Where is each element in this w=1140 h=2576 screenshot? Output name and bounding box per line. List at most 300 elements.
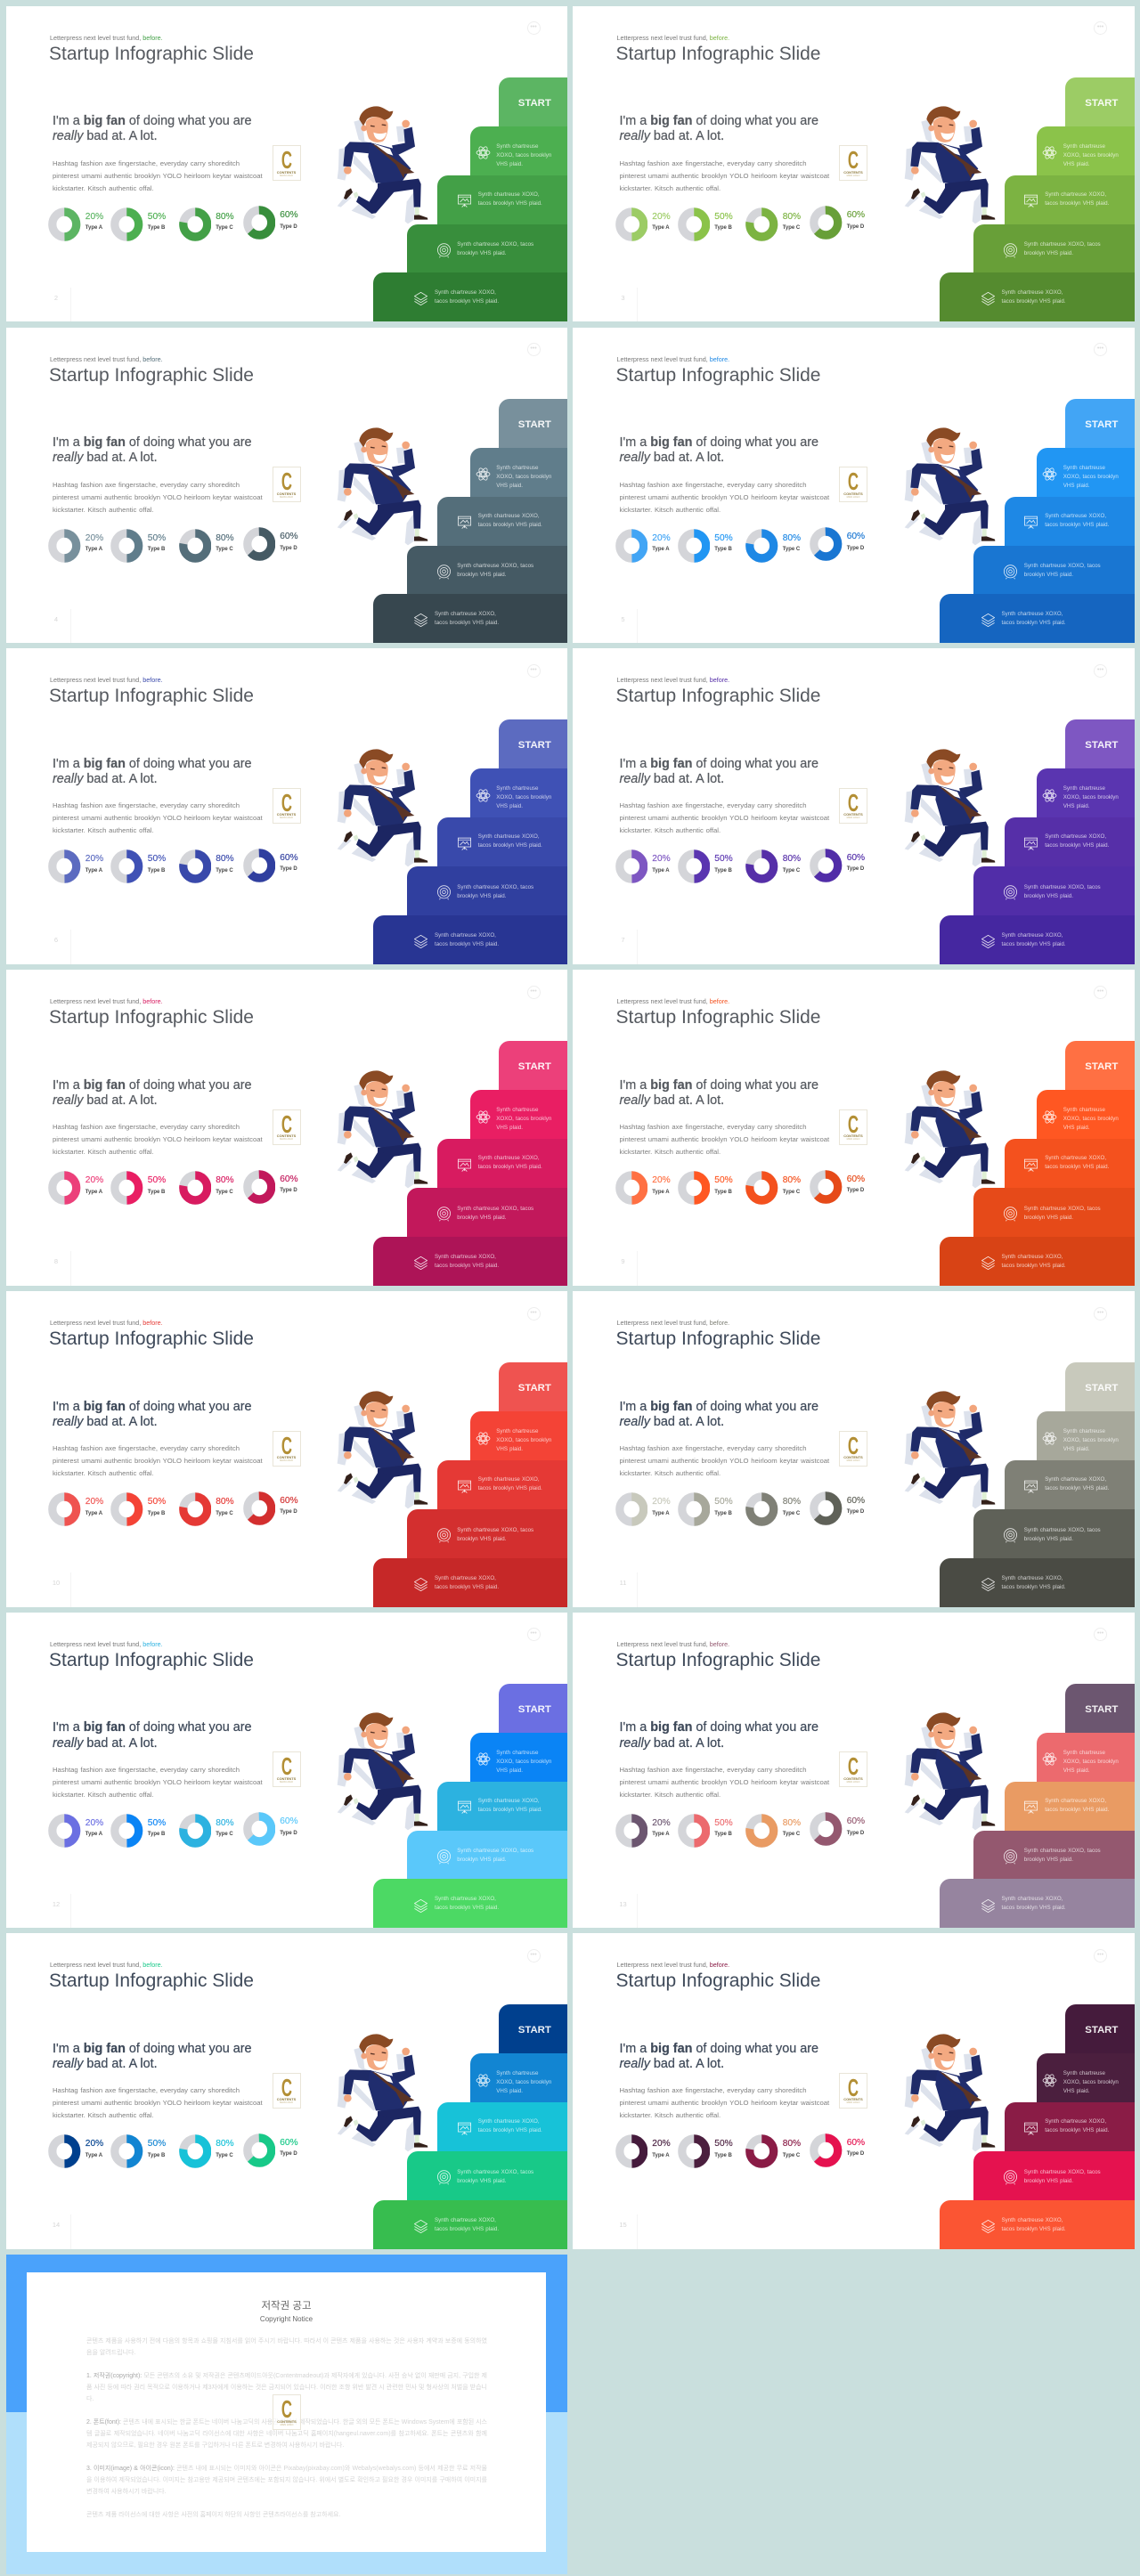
step: start: START — [1085, 1061, 1118, 1072]
donut: Type A: Type A — [652, 1832, 670, 1837]
step 2: XOXO, tacos brooklyn — [496, 152, 551, 158]
illustration: running businessman — [337, 749, 428, 867]
donut: Type D: 60% — [847, 853, 865, 863]
headline: I'm a big fan of doing what you are — [53, 2042, 252, 2056]
paragraph: pinterest umami authentic brooklyn YOLO heirloom keytar waistcoat — [53, 2099, 263, 2107]
step 4 — [973, 224, 1135, 272]
icon: menu dots: ••• — [530, 345, 537, 352]
donut: Type B: 50% — [148, 212, 166, 222]
donut: Type B: Type B — [714, 1190, 732, 1195]
step 4: brooklyn VHS plaid. — [1024, 2178, 1073, 2184]
headline — [53, 757, 252, 786]
step 2: VHS plaid. — [1063, 1125, 1089, 1131]
logo stamp: C — [848, 146, 859, 174]
step: start — [499, 2004, 567, 2053]
step 2: Synth chartreuse — [1063, 785, 1105, 792]
donut: Type D: 60% — [280, 1496, 298, 1505]
step 3: Synth chartreuse XOXO, — [1045, 833, 1106, 840]
step 5: Synth chartreuse XOXO, — [435, 1575, 496, 1581]
step 2: VHS plaid. — [1063, 803, 1089, 809]
donut: Type D — [810, 849, 868, 882]
logo stamp: C — [281, 1752, 292, 1780]
donut: Type B: 50% — [714, 212, 733, 222]
icon: menu dots: ••• — [530, 1309, 537, 1316]
step 5: Synth chartreuse XOXO, — [1001, 1254, 1063, 1260]
paragraph — [620, 1442, 829, 1480]
logo stamp: MAIN LOGO — [280, 1459, 293, 1462]
donut: Type C: 80% — [216, 1818, 234, 1828]
donut: Type B: 50% — [148, 1818, 166, 1828]
step 3 — [437, 1139, 567, 1188]
donut: Type B: 50% — [148, 2139, 166, 2149]
title: Startup Infographic Slide — [616, 1650, 820, 1670]
step 2: XOXO, tacos brooklyn — [496, 794, 551, 800]
panel: slide 2 green — [5, 6, 567, 321]
donut: Type B: Type B — [714, 547, 732, 552]
headline: I'm a big fan of doing what you are — [53, 1400, 252, 1414]
donut: Type B: Type B — [714, 2153, 732, 2158]
step: start — [1065, 2004, 1135, 2053]
step 3: tacos brooklyn VHS plaid. — [478, 1807, 542, 1813]
icon: menu dots — [1094, 664, 1107, 678]
headline — [620, 1400, 818, 1430]
donut: Type A: Type A — [86, 1190, 102, 1195]
paragraph: pinterest umami authentic brooklyn YOLO heirloom keytar waistcoat — [620, 814, 829, 822]
logo stamp: MAIN LOGO — [280, 175, 293, 177]
step 2: XOXO, tacos brooklyn — [496, 1437, 551, 1443]
donut: Type C: 80% — [783, 532, 801, 543]
paragraph: pinterest umami authentic brooklyn YOLO heirloom keytar waistcoat — [53, 814, 263, 822]
donut: Type C: Type C — [216, 1832, 233, 1837]
donut: Type A — [48, 1171, 107, 1205]
donut: Type A — [615, 529, 671, 563]
step 4 — [973, 545, 1135, 594]
icon: menu dots — [527, 21, 540, 35]
donut: Type A: 20% — [652, 532, 671, 543]
paragraph: kickstarter. Kitsch authentic offal. — [53, 1469, 154, 1477]
paragraph — [53, 801, 263, 834]
step 5: Synth chartreuse XOXO, — [435, 289, 496, 296]
step 3: tacos brooklyn VHS plaid. — [478, 1164, 542, 1170]
donut: Type A: 20% — [86, 854, 103, 864]
step 5: tacos brooklyn VHS plaid. — [1001, 1263, 1066, 1269]
step 5: Synth chartreuse XOXO, — [1001, 611, 1063, 617]
step 4 — [406, 224, 567, 272]
logo stamp: MAIN LOGO — [280, 1138, 293, 1141]
icon: menu dots — [527, 343, 540, 356]
logo stamp: MAIN LOGO — [847, 1781, 859, 1784]
step 3 — [1005, 1782, 1135, 1831]
logo stamp: C — [281, 2074, 292, 2101]
step 5 — [940, 915, 1135, 964]
step 2: VHS plaid. — [1063, 483, 1089, 488]
headline: I'm a big fan of doing what you are — [620, 1078, 818, 1093]
logo stamp — [839, 788, 867, 824]
paragraph: Hashtag fashion axe fingerstache, everyday carry shoreditch — [53, 801, 240, 809]
donut: Type A: Type A — [86, 547, 102, 552]
paragraph: Hashtag fashion axe fingerstache, everyday carry shoreditch — [620, 1444, 807, 1452]
headline — [53, 435, 252, 465]
panel: slide 7 purple — [573, 648, 1135, 964]
white notice card — [27, 2272, 546, 2552]
step 3: tacos brooklyn VHS plaid. — [1045, 1485, 1109, 1491]
logo stamp: C — [848, 1432, 859, 1459]
paragraph: pinterest umami authentic brooklyn YOLO heirloom keytar waistcoat — [53, 1457, 263, 1465]
donut: Type A: Type A — [86, 1510, 102, 1516]
page number: 5 — [621, 614, 625, 623]
step 4 — [406, 1188, 567, 1237]
step: start: START — [1085, 418, 1118, 429]
step: start: START — [518, 740, 551, 751]
step 5 — [372, 1558, 567, 1606]
paragraph: Hashtag fashion axe fingerstache, everyday carry shoreditch — [53, 1444, 240, 1452]
headline: really bad at. A lot. — [620, 772, 724, 786]
donut: Type D: Type D — [847, 2151, 864, 2157]
headline: I'm a big fan of doing what you are — [620, 1400, 818, 1414]
donut: Type C: Type C — [783, 2153, 800, 2158]
step 5: tacos brooklyn VHS plaid. — [1001, 1905, 1066, 1911]
step 2: Synth chartreuse — [496, 143, 538, 150]
paragraph — [620, 481, 830, 513]
step 5: tacos brooklyn VHS plaid. — [435, 298, 499, 305]
step 3 — [1005, 2102, 1135, 2151]
title: Startup Infographic Slide — [49, 686, 254, 706]
illustration: running businessman — [303, 1678, 570, 1936]
step 4 — [406, 866, 567, 915]
logo stamp: CONTENTS — [277, 492, 296, 495]
donut: Type B: Type B — [714, 868, 732, 874]
step: start: START — [518, 98, 551, 109]
paragraph — [620, 800, 829, 837]
donut: Type A: Type A — [652, 1190, 670, 1195]
headline: I'm a big fan of doing what you are — [53, 114, 252, 128]
step 2: Synth chartreuse — [1063, 2070, 1105, 2076]
step 2: VHS plaid. — [1063, 1767, 1089, 1774]
step 2: VHS plaid. — [1063, 2088, 1089, 2094]
step: start — [1065, 77, 1135, 126]
step 5: tacos brooklyn VHS plaid. — [435, 1584, 499, 1590]
headline: I'm a big fan of doing what you are — [53, 435, 252, 450]
step 4: Synth chartreuse XOXO, tacos — [457, 1206, 533, 1212]
donut: Type A: 20% — [86, 532, 103, 543]
icon: menu dots — [1094, 1949, 1107, 1962]
step 4 — [973, 866, 1135, 915]
donut: Type B: Type B — [714, 1510, 732, 1516]
logo stamp: CONTENTS — [277, 2418, 297, 2424]
donut: Type C: Type C — [783, 547, 800, 552]
icon: menu dots: ••• — [1097, 24, 1103, 30]
donut: Type D: 60% — [280, 532, 298, 541]
step 4: brooklyn VHS plaid. — [457, 1536, 506, 1542]
page number: 15 — [619, 2221, 627, 2229]
step 4 — [973, 1188, 1135, 1237]
donut: Type C: 80% — [216, 1175, 234, 1185]
donut: Type D: 60% — [847, 1496, 865, 1505]
donut: Type C: 80% — [783, 2139, 801, 2149]
step: start — [499, 719, 567, 768]
title: Startup Infographic Slide — [616, 44, 820, 64]
step 4: Synth chartreuse XOXO, tacos — [1024, 884, 1101, 890]
page number: 6 — [54, 936, 58, 944]
icon: menu dots: ••• — [1097, 667, 1103, 673]
logo stamp: C — [281, 1110, 292, 1138]
donut: Type D — [243, 206, 298, 240]
paragraph: kickstarter. Kitsch authentic offal. — [53, 506, 154, 513]
logo stamp: C — [281, 146, 292, 174]
step: start — [499, 1362, 567, 1411]
donut: Type B: Type B — [148, 1190, 165, 1195]
step 4 — [973, 1509, 1135, 1558]
headline: really bad at. A lot. — [620, 129, 724, 143]
donut: Type D — [810, 1812, 868, 1846]
donut: Type A — [48, 1492, 107, 1526]
logo stamp: C — [281, 2395, 292, 2423]
step 2: VHS plaid. — [496, 483, 523, 488]
headline: really bad at. A lot. — [620, 2057, 724, 2071]
step 2: VHS plaid. — [496, 1446, 523, 1452]
logo stamp — [839, 2073, 867, 2109]
paragraph: Hashtag fashion axe fingerstache, everyday carry shoreditch — [620, 159, 807, 167]
donut: Type C: 80% — [216, 532, 234, 543]
step 3: Synth chartreuse XOXO, — [1045, 513, 1106, 518]
step: start: START — [1085, 740, 1118, 751]
step 5: Synth chartreuse XOXO, — [1001, 1896, 1063, 1902]
step 5: Synth chartreuse XOXO, — [1001, 1575, 1063, 1581]
paragraph: Hashtag fashion axe fingerstache, everyday carry shoreditch — [53, 1123, 240, 1131]
step 4: brooklyn VHS plaid. — [457, 2178, 506, 2184]
donut: Type B — [678, 529, 733, 563]
logo stamp: C — [848, 467, 859, 495]
step 2: XOXO, tacos brooklyn — [1063, 2079, 1119, 2085]
donut: Type D: Type D — [280, 2151, 297, 2157]
step 5: tacos brooklyn VHS plaid. — [435, 1905, 499, 1911]
headline — [620, 114, 818, 143]
step 2: Synth chartreuse — [1063, 143, 1105, 150]
donut: Type A: Type A — [86, 2153, 102, 2158]
step 3: tacos brooklyn VHS plaid. — [1045, 2127, 1109, 2133]
paragraph: pinterest umami authentic brooklyn YOLO heirloom keytar waistcoat — [53, 172, 263, 180]
donut: Type D: 60% — [280, 853, 298, 863]
donut: Type C: Type C — [783, 1190, 800, 1195]
icon: menu dots — [527, 664, 540, 678]
page number: 12 — [53, 1900, 60, 1908]
paragraph — [620, 1121, 829, 1158]
donut: Type C: Type C — [216, 547, 233, 552]
step 3 — [437, 175, 567, 224]
headline — [620, 757, 818, 787]
donut: Type A — [48, 207, 103, 241]
step 4: Synth chartreuse XOXO, tacos — [457, 241, 533, 248]
paragraph: Hashtag fashion axe fingerstache, everyday carry shoreditch — [53, 159, 240, 167]
headline: really bad at. A lot. — [53, 1093, 158, 1108]
title: Startup Infographic Slide — [616, 365, 820, 385]
donut: Type D: 60% — [280, 1816, 298, 1826]
donut: Type A: 20% — [652, 854, 671, 864]
logo stamp: CONTENTS — [277, 1455, 296, 1459]
step 2: XOXO, tacos brooklyn — [1063, 474, 1119, 479]
step 5 — [940, 1237, 1135, 1286]
step 4: Synth chartreuse XOXO, tacos — [1024, 2169, 1101, 2175]
donut: Type C — [179, 1171, 238, 1205]
logo stamp: MAIN LOGO — [847, 1459, 859, 1462]
illustration: running businessman — [869, 1678, 1136, 1936]
step 3: Synth chartreuse XOXO, — [478, 1155, 540, 1161]
logo stamp: CONTENTS — [843, 1776, 863, 1781]
logo stamp — [273, 2073, 301, 2109]
paragraph: kickstarter. Kitsch authentic offal. — [53, 1148, 154, 1156]
logo stamp — [839, 1751, 867, 1787]
logo stamp: MAIN LOGO — [847, 817, 859, 819]
step: start — [499, 399, 567, 447]
step 2: VHS plaid. — [1063, 1446, 1089, 1452]
step 2 — [1037, 447, 1135, 497]
headline: I'm a big fan of doing what you are — [53, 1720, 252, 1735]
step 5: Synth chartreuse XOXO, — [435, 611, 496, 617]
step 4: Synth chartreuse XOXO, tacos — [457, 1527, 533, 1533]
intro paragraph: 콘텐츠 제품을 사용하기 전에 다음의 항목과 쇼핑몰 지침서를 읽어 주시기 바랍니다. 따라서 이 콘텐츠 제품을 사용하는 것은 사용자 계약과 보증에 동의하였음을 알려드립니다. — [86, 2338, 487, 2356]
donut: Type C — [745, 207, 801, 241]
kicker text: Letterpress next level trust fund, before. — [616, 1319, 729, 1327]
illustration: running businessman — [905, 106, 996, 224]
step: start: START — [518, 2025, 551, 2036]
copyright clause: 1. 저작권(copyright): 모든 콘텐츠의 소유 및 저작권은 콘텐츠메이드아웃(Contentmadeout)과 제작자에게 있습니다. 사전 승낙 없이 재판매 금지, 구입한 제품 사진 등에 따라 권리 목적으로 이용하거나 제3자에게 이용하는 것은 금지되어 있습니다. 이러한 조항 위반 발견 시 관련한 민사 및 형사상의 처벌을 받습니다. — [86, 2373, 487, 2402]
paragraph — [53, 159, 263, 192]
panel: slide 10 red — [5, 1291, 567, 1606]
step 5 — [372, 1237, 567, 1286]
step 3: Synth chartreuse XOXO, — [1045, 1155, 1106, 1161]
donut: Type B: Type B — [148, 225, 165, 231]
headline: I'm a big fan of doing what you are — [620, 435, 818, 450]
donut: Type B — [110, 849, 166, 883]
step 2: Synth chartreuse — [496, 785, 538, 792]
paragraph: Hashtag fashion axe fingerstache, everyday carry shoreditch — [620, 1766, 807, 1774]
paragraph: Hashtag fashion axe fingerstache, everyday carry shoreditch — [53, 1766, 240, 1774]
panel: slide 13 muted mix — [573, 1613, 1135, 1928]
logo stamp: CONTENTS — [843, 1134, 863, 1138]
kicker text: Letterpress next level trust fund, before. — [616, 997, 729, 1005]
headline: I'm a big fan of doing what you are — [53, 757, 252, 771]
donut: Type B: 50% — [148, 532, 166, 543]
donut: Type B — [110, 1492, 169, 1526]
donut: Type B — [678, 849, 737, 883]
page number: 11 — [620, 1579, 626, 1587]
donut: Type B: Type B — [148, 547, 165, 552]
donut: Type C: Type C — [783, 225, 800, 231]
headline: really bad at. A lot. — [53, 772, 158, 786]
logo stamp: MAIN LOGO — [280, 2101, 293, 2104]
donut: Type B — [110, 207, 166, 241]
step 4: Synth chartreuse XOXO, tacos — [457, 563, 533, 569]
donut: Type D — [810, 2133, 868, 2167]
donut: Type C: 80% — [216, 854, 234, 864]
icon: menu dots — [1094, 1628, 1107, 1641]
step 5: Synth chartreuse XOXO, — [1001, 289, 1063, 296]
step 5: Synth chartreuse XOXO, — [1001, 932, 1063, 939]
step 5: tacos brooklyn VHS plaid. — [435, 1263, 499, 1269]
donut: Type C: Type C — [216, 2153, 233, 2158]
step 2 — [470, 447, 567, 497]
step 3: tacos brooklyn VHS plaid. — [1045, 842, 1109, 849]
donut: Type A: 20% — [652, 1497, 671, 1507]
title: Startup Infographic Slide — [616, 686, 820, 706]
step: start: START — [1085, 1383, 1118, 1394]
step 4: Synth chartreuse XOXO, tacos — [1024, 1206, 1101, 1212]
paragraph: kickstarter. Kitsch authentic offal. — [53, 826, 154, 834]
logo stamp: CONTENTS — [277, 812, 296, 817]
donut: Type D — [243, 2133, 302, 2167]
panel: slide 11 grey — [573, 1291, 1135, 1606]
donut: Type C — [179, 529, 234, 563]
icon: menu dots — [527, 1949, 540, 1962]
step 2: VHS plaid. — [496, 1125, 523, 1131]
copyright title: 저작권 공고 — [261, 2301, 312, 2312]
logo stamp: MAIN LOGO — [280, 817, 293, 819]
step: start: START — [1085, 2025, 1118, 2036]
step 2 — [470, 768, 567, 817]
donut: Type A: 20% — [652, 2139, 671, 2149]
step 3: Synth chartreuse XOXO, — [478, 191, 540, 198]
logo stamp — [273, 145, 301, 181]
step: start: START — [1085, 1704, 1118, 1715]
headline: really bad at. A lot. — [620, 1736, 724, 1751]
step 3: Synth chartreuse XOXO, — [1045, 1798, 1106, 1804]
step 2 — [1037, 126, 1135, 175]
step 3 — [437, 817, 567, 866]
donut: Type A: 20% — [652, 212, 671, 222]
headline: I'm a big fan of doing what you are — [53, 1078, 252, 1093]
step 5 — [940, 272, 1135, 321]
logo stamp — [273, 788, 301, 824]
paragraph: kickstarter. Kitsch authentic offal. — [53, 2111, 154, 2119]
step 3 — [437, 1782, 567, 1831]
icon: menu dots — [1094, 986, 1107, 999]
donut: Type B: 50% — [148, 1497, 166, 1507]
donut: Type D: Type D — [847, 545, 864, 550]
logo stamp: CONTENTS — [843, 2097, 863, 2101]
logo stamp: MAIN LOGO — [847, 175, 859, 177]
donut: Type D: Type D — [280, 1831, 297, 1836]
donut: Type A: 20% — [652, 1818, 671, 1828]
step 5: tacos brooklyn VHS plaid. — [435, 941, 499, 947]
step: start: START — [1085, 98, 1118, 109]
step 4: brooklyn VHS plaid. — [1024, 572, 1073, 578]
donut: Type C: Type C — [216, 225, 233, 231]
title: Startup Infographic Slide — [49, 1971, 254, 1991]
step 3: tacos brooklyn VHS plaid. — [1045, 522, 1109, 527]
kicker text: Letterpress next level trust fund, before. — [616, 676, 729, 684]
donut: Type A: Type A — [652, 2153, 670, 2158]
headline: really bad at. A lot. — [53, 2057, 158, 2071]
donut: Type D: 60% — [847, 1174, 865, 1184]
paragraph — [53, 2084, 263, 2122]
step 2 — [470, 1733, 567, 1782]
illustration: running businessman — [869, 714, 1136, 972]
logo stamp — [273, 467, 301, 502]
step 3: Synth chartreuse XOXO, — [1045, 1476, 1106, 1483]
step 3: Synth chartreuse XOXO, — [1045, 2118, 1106, 2125]
step 4 — [973, 2151, 1135, 2200]
step 2: Synth chartreuse — [1063, 1107, 1105, 1113]
headline: really bad at. A lot. — [620, 1093, 724, 1108]
step: start — [499, 1041, 567, 1090]
title: Startup Infographic Slide — [616, 1007, 820, 1028]
donut: Type C — [179, 207, 234, 241]
logo stamp: MAIN LOGO — [847, 1138, 859, 1141]
paragraph: Hashtag fashion axe fingerstache, everyday carry shoreditch — [620, 801, 807, 809]
paragraph — [53, 1764, 263, 1801]
donut: Type C: 80% — [783, 854, 801, 864]
donut: Type A — [48, 2134, 107, 2168]
